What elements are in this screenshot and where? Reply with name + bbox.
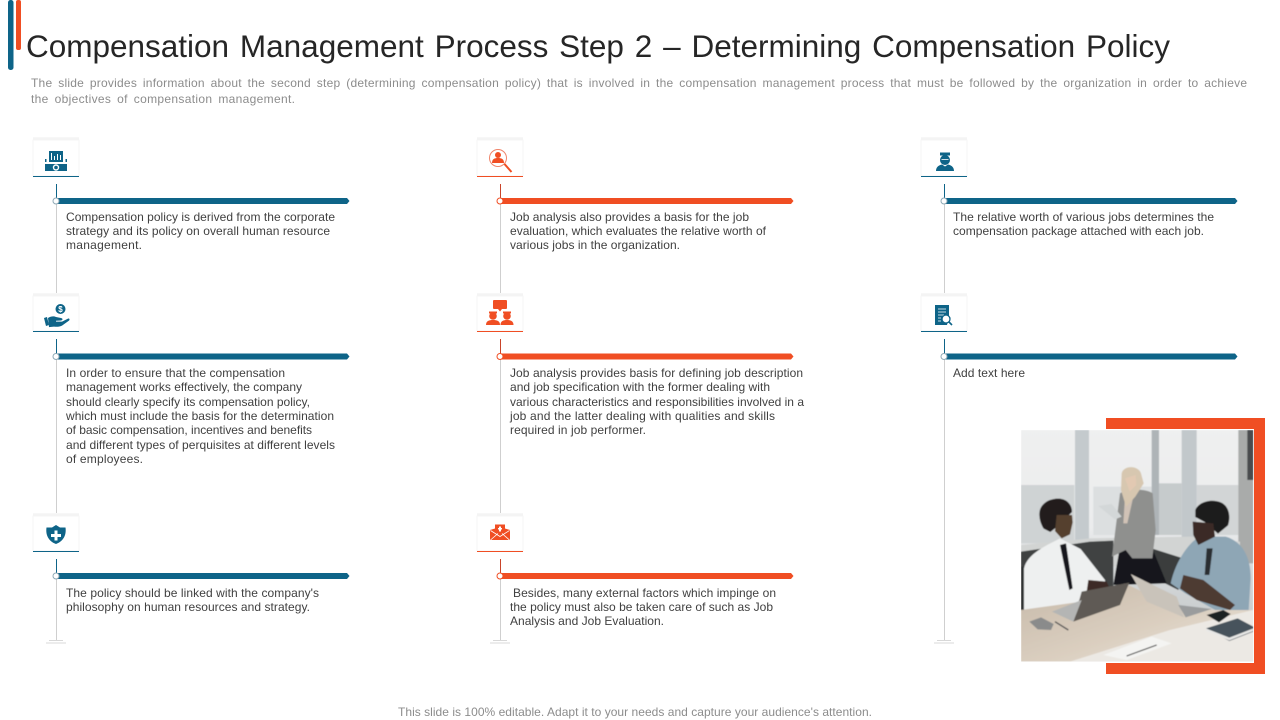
left laptop [1073, 583, 1129, 622]
text: Besides, many external factors which impinge on [513, 586, 776, 600]
item: specify policy [33, 293, 350, 516]
window frames [1075, 430, 1089, 542]
photo: business meeting [1021, 430, 1253, 662]
icon: envelope [490, 524, 510, 540]
text: management. [66, 238, 142, 252]
orange frame [1106, 418, 1265, 674]
text: The relative worth of various jobs determines the [953, 210, 1214, 224]
item: relative worth [921, 137, 1238, 296]
text: In order to ensure that the compensation [66, 366, 285, 380]
text: of employees. [66, 452, 143, 466]
text: evaluation, which evaluates the relative worth of [510, 224, 767, 238]
sill and bench [1021, 537, 1240, 567]
phones, pen, notebook [1029, 617, 1054, 630]
text [66, 586, 319, 614]
text [953, 210, 1214, 238]
text: and job specification with the former dealing with [510, 380, 770, 394]
timeline column 1 [33, 137, 350, 643]
footer note: This slide is 100% editable. Adapt it to your needs and capture your audience's attention. [398, 705, 872, 719]
text [510, 586, 776, 628]
right man [1171, 537, 1251, 610]
table [1021, 583, 1253, 662]
timeline column 2 [477, 137, 804, 643]
icon: shield with plus [46, 525, 66, 544]
item: external factors [477, 513, 794, 643]
icon: hand with coin [44, 304, 70, 327]
accent bars [8, 0, 21, 70]
right laptop [1131, 574, 1184, 617]
item: job evaluation [477, 137, 794, 296]
text: job and the latter dealing with qualities and skills [509, 409, 775, 423]
icon: two people with speech bubble [486, 300, 514, 325]
text: various jobs in the organization. [510, 238, 680, 252]
item: add text [921, 293, 1238, 643]
timeline column 3 [921, 137, 1238, 643]
icon: person [936, 152, 954, 171]
text: should clearly specify its compensation policy, [66, 395, 310, 409]
icon: document with magnifier [935, 305, 952, 325]
item: corporate strategy [33, 137, 350, 296]
icon: money and chart [45, 151, 67, 171]
subtitle: The slide provides information about the second step (determining compensation policy) that is involved in the compensation management process that must be followed by the organization in order to achieve [31, 76, 1247, 90]
text: compensation package attached with each job. [953, 224, 1204, 238]
text: philosophy on human resources and strategy. [66, 600, 310, 614]
text: which must include the basis for the determination [65, 409, 334, 423]
text: of basic compensation, incentives and benefits [66, 423, 312, 437]
text: required in job performer. [510, 423, 646, 437]
subtitle: the objectives of compensation management. [31, 92, 295, 106]
text: the policy must also be taken care of such as Job [510, 600, 773, 614]
text [509, 366, 804, 437]
item: philosophy [33, 513, 350, 643]
text: Analysis and Job Evaluation. [510, 614, 664, 628]
text: and different types of perquisites at different levels [66, 438, 335, 452]
text: Add text here [953, 366, 1025, 380]
text: Job analysis provides basis for defining job description [510, 366, 803, 380]
icon: hand with coin: $ [58, 305, 63, 314]
subtitle [31, 76, 1247, 106]
text: various characteristics and responsibilities involved in a [510, 395, 804, 409]
left man [1024, 538, 1105, 612]
text: Job analysis also provides a basis for the job [510, 210, 749, 224]
text: The policy should be linked with the company's [66, 586, 319, 600]
icon: magnifier with person [490, 150, 512, 172]
text: strategy and its policy on overall human resource [66, 224, 330, 238]
woman [1113, 547, 1167, 585]
text: Compensation policy is derived from the corporate [66, 210, 335, 224]
text: management works effectively, the company [66, 380, 302, 394]
text [66, 210, 335, 252]
title: Compensation Management Process Step 2 – Determining Compensation Policy [26, 28, 1170, 64]
item: job description [477, 293, 804, 516]
photo panel [1020, 418, 1265, 674]
text [510, 210, 767, 252]
text [65, 366, 335, 466]
